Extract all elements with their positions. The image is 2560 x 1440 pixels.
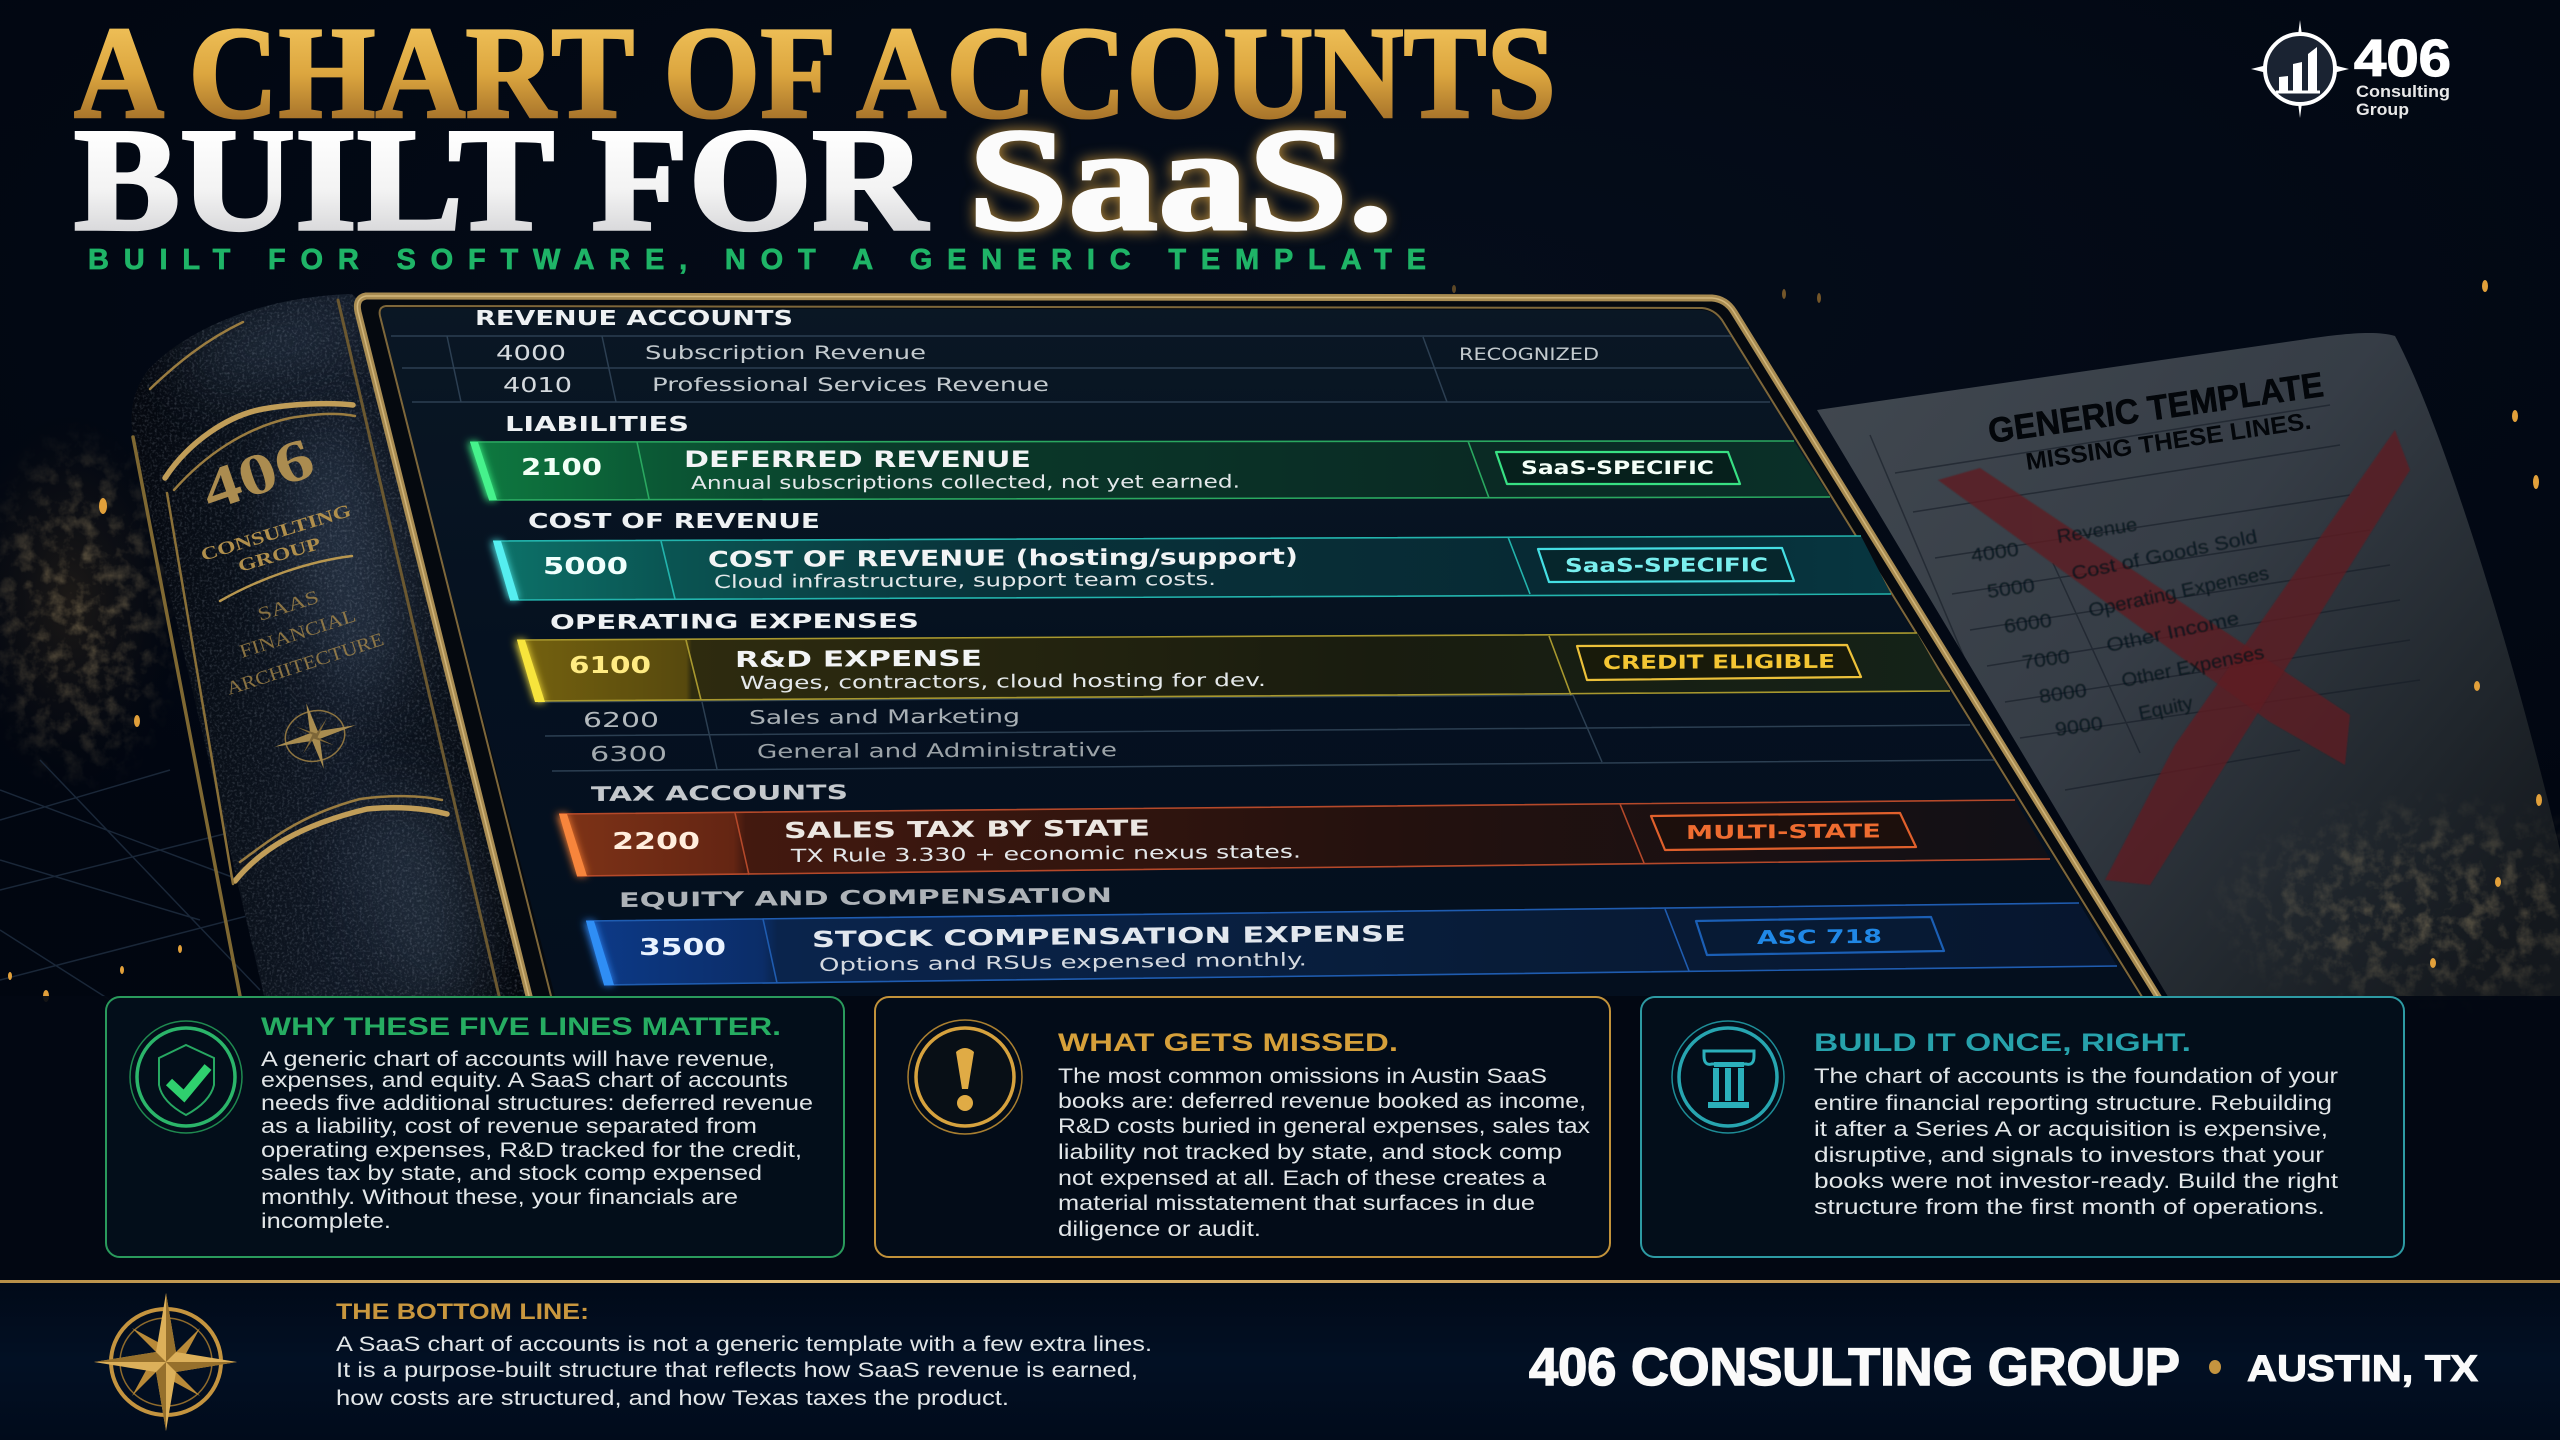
row 2200 sales tax: 2200: [612, 829, 700, 855]
row 5000 cost of revenue: [491, 536, 1891, 600]
panel body: [1814, 1065, 2338, 1219]
row 3500 stock compensation: Options and RSUs expensed monthly.: [819, 949, 1307, 976]
panel heading: WHY THESE FIVE LINES MATTER.: [261, 1013, 781, 1041]
paper account list: 4000: [1970, 539, 2020, 567]
dark strip behind panels: [0, 996, 2560, 1282]
generic template paper: [1817, 333, 2560, 1030]
row 2100 deferred revenue: DEFERRED REVENUE: [684, 448, 1031, 473]
section: operating expenses: [515, 609, 1950, 766]
section: tax accounts: [557, 780, 2050, 876]
paper account list: 6000: [2003, 610, 2053, 638]
row 3500 stock compensation: STOCK COMPENSATION EXPENSE: [812, 922, 1406, 953]
title line 2: BUILT FOR: [74, 98, 929, 261]
row 4010: 4010: [503, 373, 572, 397]
badge: MULTI-STATE: [1686, 820, 1881, 844]
row 2200 sales tax: TX Rule 3.330 + economic nexus states.: [789, 842, 1301, 867]
icon: pillar: [1672, 1021, 1784, 1133]
bottom line body: A SaaS chart of accounts is not a generic template with a few extra lines.: [336, 1333, 1152, 1356]
row 6200: [583, 706, 1020, 732]
spine text: saas financial architecture: FINANCIAL: [237, 605, 359, 663]
footer brand: [1529, 1338, 2478, 1397]
spine text: consulting group: CONSULTING: [198, 500, 353, 565]
panel body: [1058, 1065, 1591, 1241]
heading: TAX ACCOUNTS: [591, 780, 848, 806]
panel body: liability not tracked by state, and stock comp: [1058, 1141, 1562, 1164]
badge: [1651, 813, 1916, 850]
row 5000 cost of revenue: COST OF REVENUE (hosting/support): [708, 545, 1298, 573]
row 2100 deferred revenue: Annual subscriptions collected, not yet earned.: [691, 472, 1240, 494]
badge: [1538, 548, 1794, 582]
panel body: The most common omissions in Austin SaaS: [1058, 1065, 1547, 1088]
panel body: The chart of accounts is the foundation of your: [1814, 1065, 2338, 1088]
tagline: BUILT FOR SOFTWARE, NOT A GENERIC TEMPLATE: [88, 244, 1426, 276]
section: revenue accounts: [475, 306, 1599, 397]
badge: SaaS-SPECIFIC: [1521, 457, 1714, 479]
panel body: monthly. Without these, your financials are: [261, 1186, 738, 1209]
badge: [1577, 645, 1861, 680]
bottom line body: [336, 1333, 1152, 1410]
badge: ASC 718: [1757, 926, 1882, 949]
badge: [1496, 452, 1740, 484]
badge: [1696, 917, 1944, 955]
bottom line body: how costs are structured, and how Texas taxes the product.: [336, 1387, 1009, 1410]
footer band: [0, 1280, 2560, 1440]
icon: shield check: [130, 1021, 242, 1133]
row 6300: General and Administrative: [757, 739, 1117, 763]
row 6100 r&d expense: Wages, contractors, cloud hosting for dev.: [740, 670, 1266, 694]
row 6200: Sales and Marketing: [749, 706, 1020, 729]
paper account list: 9000: [2054, 713, 2104, 741]
spine compass emblem: [266, 692, 364, 780]
panel body: it after a Series A or acquisition is expensive,: [1814, 1118, 2328, 1141]
panel body: books were not investor-ready. Build the right: [1814, 1170, 2338, 1193]
heading: COST OF REVENUE: [528, 509, 820, 533]
book spine: [120, 290, 540, 1020]
ledger board: [357, 296, 2160, 1000]
panel: what gets missed: [875, 997, 1610, 1257]
paper account list: 8000: [2038, 680, 2088, 708]
panel body: entire financial reporting structure. Rebuilding: [1814, 1092, 2332, 1115]
row 5000 cost of revenue: Cloud infrastructure, support team costs.: [714, 569, 1216, 593]
spine text: consulting group: [198, 500, 353, 576]
panel body: sales tax by state, and stock comp expensed: [261, 1162, 762, 1185]
paper account list: 5000: [1986, 575, 2036, 603]
logo compass icon: [2251, 20, 2349, 118]
paper account list: Other Expenses: [2120, 642, 2266, 692]
paper heading: GENERIC TEMPLATE: [1986, 365, 2326, 451]
logo: Consulting: [2356, 82, 2450, 101]
panel body: structure from the first month of operations.: [1814, 1196, 2325, 1219]
row 6100 r&d expense: 6100: [569, 653, 651, 679]
paper account list: Equity: [2137, 693, 2195, 725]
logo: [2251, 20, 2451, 119]
row 6300: 6300: [590, 742, 667, 766]
panel body: expenses, and equity. A SaaS chart of accounts: [261, 1069, 788, 1092]
panel body: disruptive, and signals to investors that your: [1814, 1144, 2324, 1167]
title line 1: A CHART OF ACCOUNTS: [74, 0, 1556, 146]
gold bands: [133, 300, 500, 1000]
paper account list: [1970, 515, 2271, 741]
row 3500 stock compensation: 3500: [639, 935, 726, 961]
panel heading: BUILD IT ONCE, RIGHT.: [1814, 1029, 2191, 1057]
footer brand: AUSTIN, TX: [2247, 1348, 2478, 1389]
paper account list: Other Income: [2105, 608, 2241, 657]
row 4010: Professional Services Revenue: [652, 374, 1049, 396]
row 2100 deferred revenue: [468, 441, 1830, 500]
bottom line body: It is a purpose-built structure that reflects how SaaS revenue is earned,: [336, 1359, 1138, 1382]
row 4000: 4000: [496, 341, 566, 365]
title accent: SaaS: SaaS.: [968, 98, 1393, 261]
panel body: A generic chart of accounts will have revenue,: [261, 1048, 775, 1071]
footer brand: 406 CONSULTING GROUP: [1529, 1338, 2180, 1397]
row 6100 r&d expense: [515, 633, 1950, 702]
row 6200: 6200: [583, 708, 659, 732]
heading: EQUITY AND COMPENSATION: [619, 883, 1112, 912]
paper account list: 7000: [2021, 646, 2071, 674]
panel: why these five lines matter: [106, 997, 844, 1257]
title: [74, 0, 1556, 261]
heading: REVENUE ACCOUNTS: [475, 306, 793, 330]
spine text: consulting group: GROUP: [236, 533, 323, 576]
row 4010: [503, 373, 1049, 397]
spine text: saas financial architecture: [224, 587, 387, 700]
row 2200 sales tax: [557, 800, 2050, 876]
red X: [1938, 430, 2410, 885]
paper subheading: MISSING THESE LINES.: [2024, 408, 2313, 476]
board frame: [357, 296, 2160, 1000]
badge: SaaS-SPECIFIC: [1565, 554, 1768, 577]
row 4000: Subscription Revenue: [645, 342, 926, 364]
paper account list: Operating Expenses: [2087, 563, 2271, 622]
panel body: incomplete.: [261, 1210, 391, 1233]
panel heading: WHAT GETS MISSED.: [1058, 1029, 1398, 1057]
paper dust and embers: [2200, 681, 2560, 1030]
section: liabilities: [468, 412, 1830, 500]
panel body: not expensed at all. Each of these creates a: [1058, 1167, 1546, 1190]
board grid lines: [391, 336, 1994, 771]
paper account list: Cost of Goods Sold: [2070, 527, 2259, 585]
icon: gold compass: [94, 1293, 237, 1431]
logo: Group: [2356, 100, 2409, 119]
row 5000 cost of revenue: 5000: [543, 554, 628, 580]
row 6100 r&d expense: R&D EXPENSE: [735, 647, 982, 673]
panel body: R&D costs buried in general expenses, sales tax: [1058, 1115, 1591, 1138]
row 2200 sales tax: SALES TAX BY STATE: [784, 816, 1150, 844]
paper account list: Revenue: [2055, 515, 2139, 548]
panel body: needs five additional structures: deferred revenue: [261, 1092, 813, 1115]
heading: LIABILITIES: [505, 412, 689, 436]
spine text: 406: 406: [193, 425, 322, 523]
panel: build it once, right: [1641, 997, 2404, 1257]
row 4000: [496, 341, 1599, 365]
logo wordmark: 406: [2354, 30, 2451, 88]
panel body: diligence or audit.: [1058, 1218, 1261, 1241]
panel body: operating expenses, R&D tracked for the credit,: [261, 1139, 802, 1162]
bottom line heading: THE BOTTOM LINE:: [336, 1299, 589, 1324]
spine text: saas financial architecture: ARCHITECTURE: [224, 629, 387, 700]
row 6300: [590, 739, 1117, 766]
heading: OPERATING EXPENSES: [550, 609, 919, 634]
row 2100 deferred revenue: 2100: [521, 455, 602, 481]
icon: exclamation: [908, 1020, 1022, 1134]
panel body: material misstatement that surfaces in due: [1058, 1192, 1535, 1215]
spine text: saas financial architecture: SAAS: [255, 587, 322, 626]
panel body: books are: deferred revenue booked as income,: [1058, 1090, 1586, 1113]
panel body: [261, 1048, 813, 1233]
section: cost of revenue: [491, 509, 1891, 600]
panel body: as a liability, cost of revenue separated from: [261, 1115, 757, 1138]
badge: CREDIT ELIGIBLE: [1603, 651, 1835, 674]
section: equity and compensation: [584, 883, 2117, 985]
row 3500 stock compensation: [584, 903, 2117, 985]
row 4000: RECOGNIZED: [1459, 345, 1599, 365]
